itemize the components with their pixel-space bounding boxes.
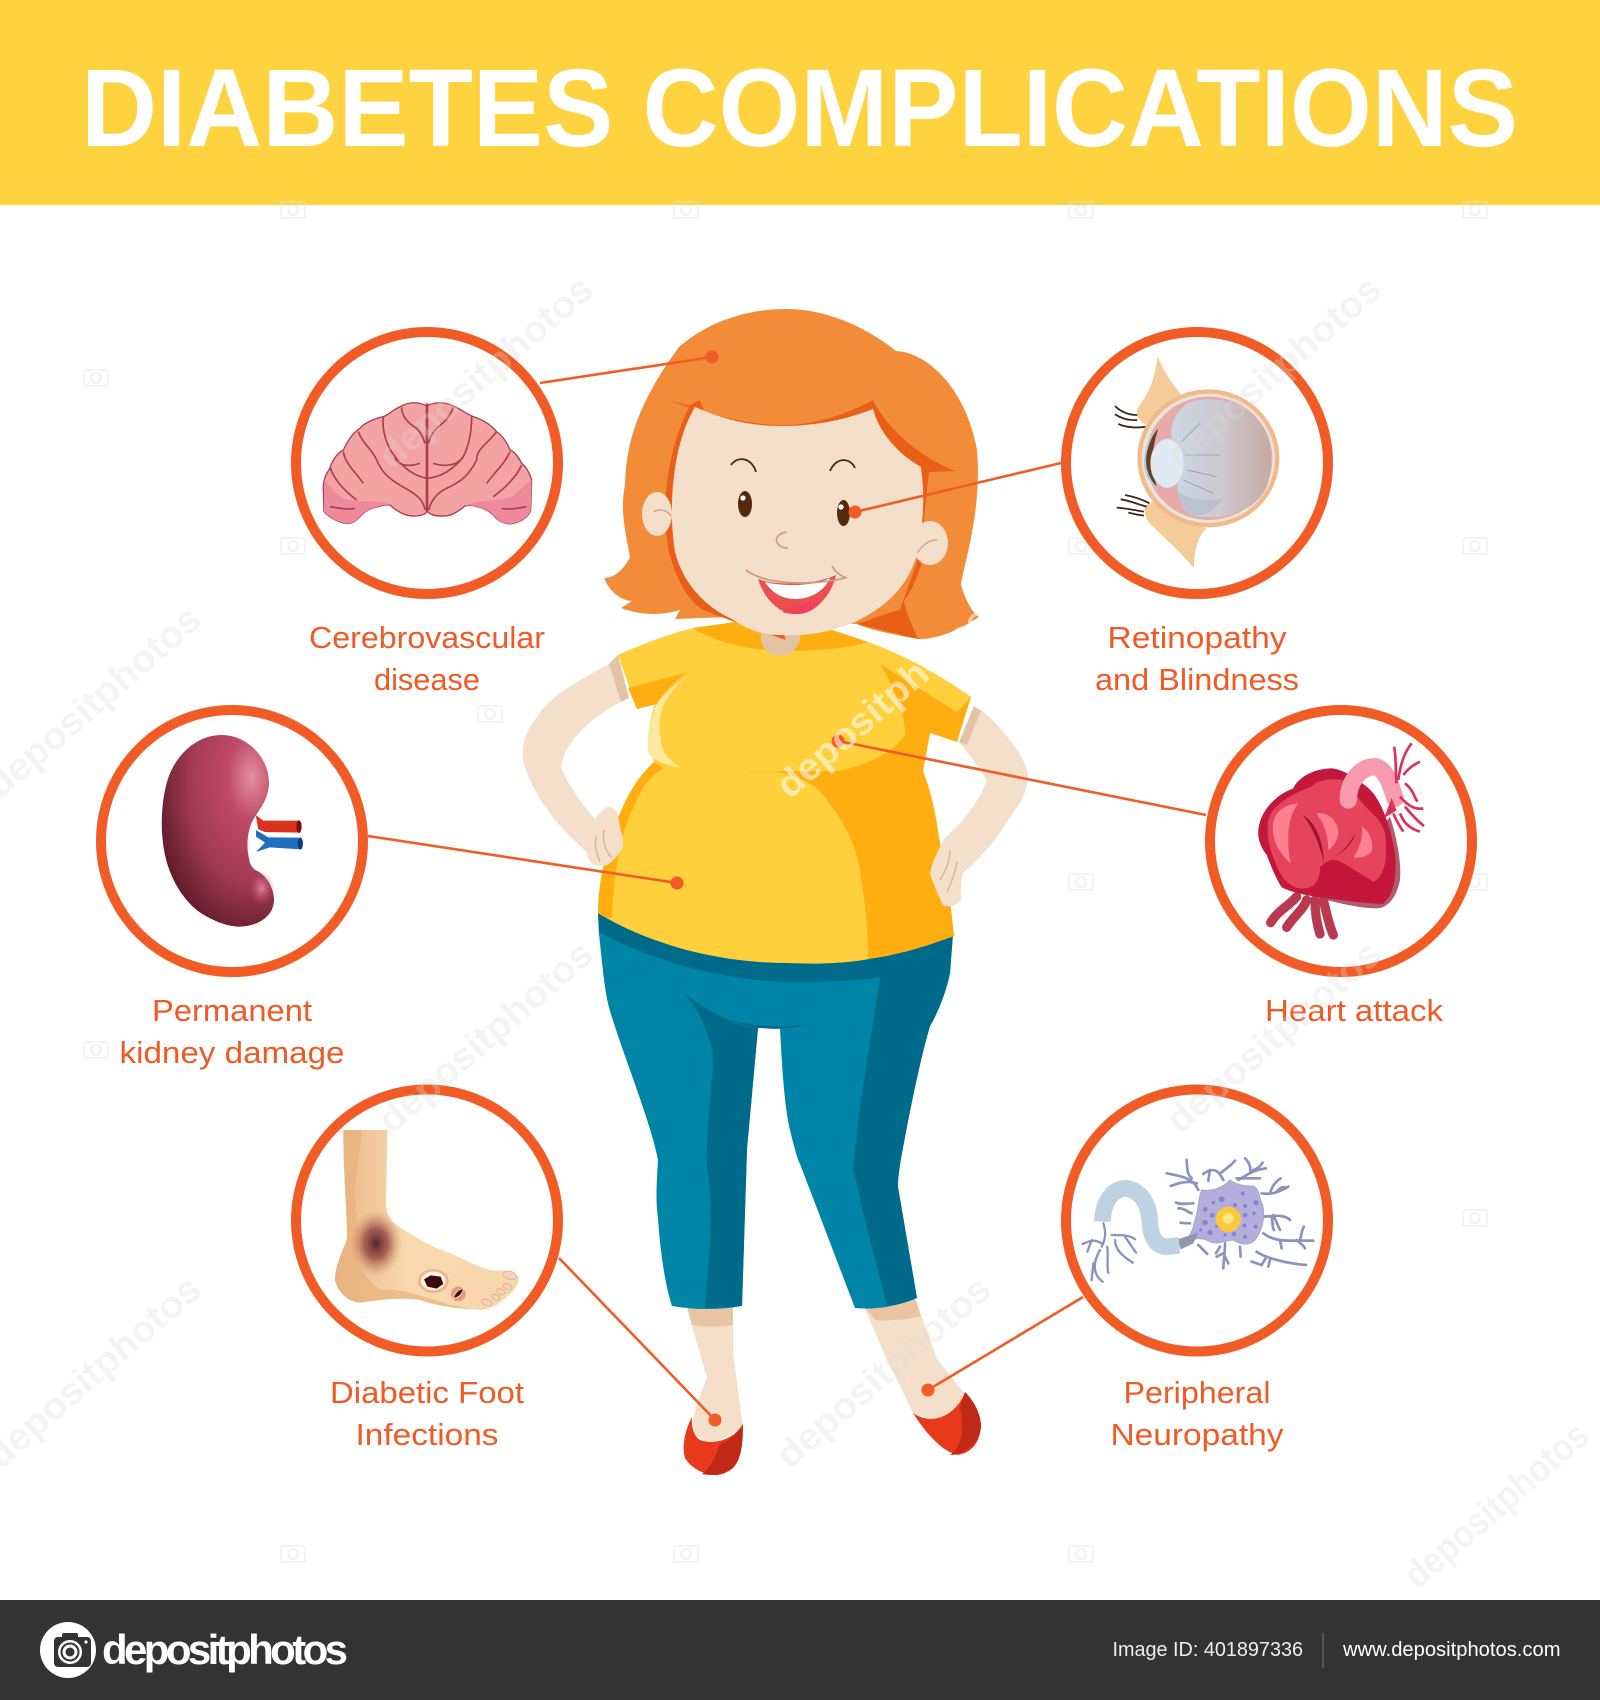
label: Infections xyxy=(356,1417,498,1452)
label xyxy=(309,620,545,697)
panel: diabetic foot infections xyxy=(296,1090,558,1452)
label: and Blindness xyxy=(1095,662,1299,697)
left hand xyxy=(587,807,623,866)
watermarks xyxy=(0,268,1597,1597)
label: Retinopathy xyxy=(1108,620,1287,655)
label: Cerebrovascular xyxy=(309,620,545,655)
trousers xyxy=(598,913,953,1309)
watermarks: depositphotos xyxy=(370,268,602,477)
footer bar xyxy=(0,1600,1600,1700)
label xyxy=(120,993,344,1070)
chest highlight xyxy=(648,675,689,767)
panel: permanent kidney damage xyxy=(101,710,363,1070)
connector lines with target dots xyxy=(368,350,1206,1426)
shirt collar xyxy=(693,621,868,651)
watermarks: depositphotos xyxy=(370,933,602,1142)
label xyxy=(330,1375,524,1452)
ears xyxy=(642,492,948,565)
icon: kidney xyxy=(162,735,303,927)
label: Neuropathy xyxy=(1110,1417,1284,1452)
watermarks: depositphotos xyxy=(1158,933,1390,1142)
left arm xyxy=(523,664,621,855)
eyes and brows xyxy=(731,459,855,526)
label: Diabetic Foot xyxy=(330,1375,524,1410)
icon: brain xyxy=(323,403,532,524)
watermarks: depositphotos xyxy=(768,598,1000,807)
panel: cerebrovascular disease xyxy=(296,332,558,697)
face xyxy=(672,407,923,635)
label: Heart attack xyxy=(1265,993,1444,1028)
watermark camera icons xyxy=(84,202,1487,1562)
label: Peripheral xyxy=(1124,1375,1270,1410)
right arm xyxy=(945,709,1028,880)
label: Permanent xyxy=(152,993,312,1028)
icon: eye xyxy=(1115,357,1279,568)
neck xyxy=(761,628,800,656)
woman figure xyxy=(523,309,1028,1475)
label: disease xyxy=(374,662,480,697)
right shoe xyxy=(913,1392,981,1455)
watermarks: depositphotos xyxy=(1158,268,1390,477)
smile xyxy=(746,566,847,614)
title: DIABETES COMPLICATIONS xyxy=(81,47,1518,170)
sleeve cuffs xyxy=(609,655,981,745)
shirt xyxy=(598,621,971,964)
logo wordmark: depositphotos xyxy=(102,1626,348,1673)
panel: retinopathy and blindness xyxy=(1066,332,1328,697)
icon: heart xyxy=(1258,743,1424,935)
label: kidney damage xyxy=(120,1035,344,1070)
hair xyxy=(604,309,979,639)
icon: neuron xyxy=(1083,1158,1313,1282)
title banner xyxy=(0,0,1600,205)
nose xyxy=(777,532,788,548)
website: www.depositphotos.com xyxy=(1342,1639,1560,1661)
label xyxy=(1095,620,1299,697)
watermarks: depositphotos xyxy=(768,1268,1000,1477)
right hand xyxy=(930,836,964,906)
panel: peripheral neuropathy xyxy=(1066,1090,1328,1452)
right leg xyxy=(863,1298,965,1422)
logo icon: camera xyxy=(40,1622,96,1678)
left leg xyxy=(687,1308,743,1445)
image id: Image ID: 401897336 xyxy=(1112,1639,1303,1661)
hair shadow xyxy=(665,400,955,640)
left shoe xyxy=(684,1417,743,1475)
panel: heart attack xyxy=(1210,710,1472,1028)
label xyxy=(1110,1375,1284,1452)
icon: foot xyxy=(335,1130,519,1310)
